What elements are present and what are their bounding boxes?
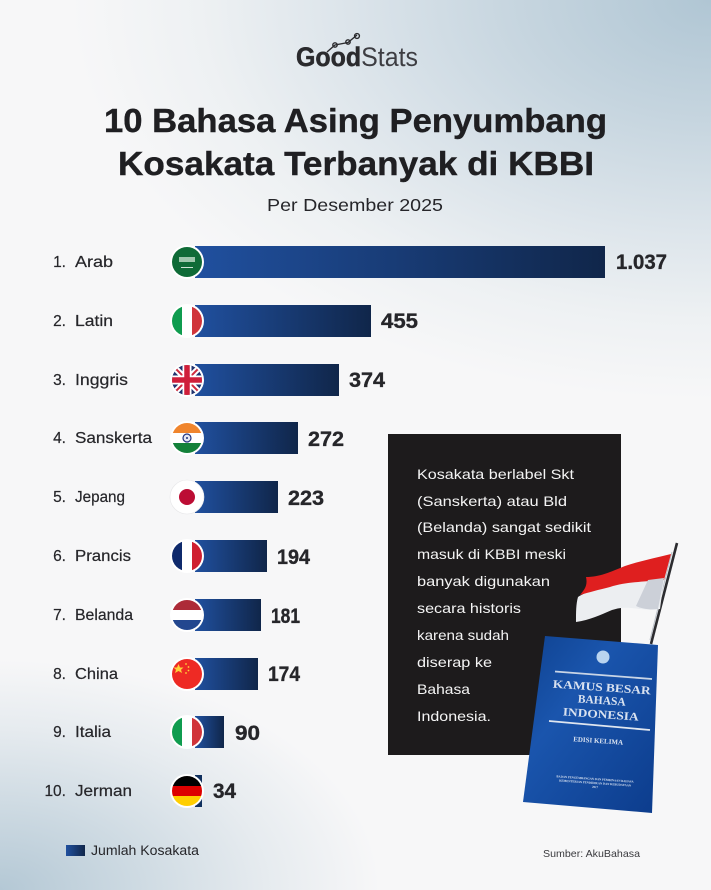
row: Inggris: Inggris [75, 372, 128, 389]
row: Jerman [44, 774, 236, 808]
row: Latin: 2. [53, 313, 66, 330]
row: Prancis: 194 [277, 546, 310, 569]
row: China: 8. [53, 666, 66, 683]
callout: black text panel: masuk di KBBI meski [417, 546, 566, 562]
row: Belanda: 181 [271, 605, 300, 628]
logo wordmark: GoodStats [296, 42, 418, 72]
row: Jepang: 5. [53, 489, 66, 506]
row: Latin: Latin [75, 313, 113, 330]
row: Latin [53, 304, 418, 338]
logo: GoodStats [296, 34, 418, 72]
row: Jepang: 223 [288, 487, 324, 510]
row: Arab [53, 245, 667, 279]
row: Arab: 1. [53, 254, 66, 271]
callout: black text panel: Kosakata berlabel Skt [417, 466, 574, 482]
row: Italia [53, 715, 260, 749]
callout: black text panel: (Belanda) sangat sedikit [417, 519, 591, 535]
row: Sanskerta [53, 421, 344, 455]
row: China: China [75, 666, 118, 683]
callout: black text panel: karena sudah [417, 627, 509, 643]
row: Inggris [53, 363, 385, 397]
callout: black text panel: banyak digunakan [417, 573, 550, 589]
legend: Jumlah Kosakata [91, 843, 200, 858]
title [104, 102, 607, 182]
icon: KBBI book: BADAN PENGEMBANGAN DAN PEMBINAAN BAHASA [556, 774, 635, 784]
row: Jepang [53, 480, 324, 514]
icon: KBBI book [523, 636, 658, 813]
row: Italia: 90 [235, 722, 260, 745]
row: Prancis: Prancis [75, 548, 131, 565]
callout: black text panel: secara historis [417, 600, 521, 616]
icon: KBBI book: KAMUS BESAR [552, 679, 652, 697]
row: Inggris: 374 [349, 369, 385, 392]
row: Italia: 9. [53, 724, 66, 741]
icon: KBBI book: BAHASA [577, 693, 627, 709]
row: Sanskerta: 4. [53, 430, 66, 447]
callout: black text panel [388, 434, 621, 755]
row: Sanskerta: Sanskerta [75, 430, 152, 447]
icon: KBBI book: 2017 [592, 785, 599, 789]
row: Sanskerta: 272 [308, 428, 344, 451]
row: Jerman: 10. [44, 783, 66, 800]
row: China: 174 [268, 663, 300, 686]
logo trend line icon [327, 34, 359, 52]
row: Latin: 455 [381, 310, 418, 333]
bar chart [44, 245, 667, 808]
source: Sumber: AkuBahasa [543, 848, 640, 860]
title: Kosakata Terbanyak di KBBI [118, 145, 594, 182]
row: Italia: Italia [75, 724, 111, 741]
row: Inggris: 3. [53, 372, 66, 389]
row: Prancis: 6. [53, 548, 66, 565]
icon: KBBI book: EDISI KELIMA [573, 735, 623, 747]
row: Jerman: 34 [213, 780, 236, 803]
subtitle: Per Desember 2025 [267, 195, 443, 215]
callout: black text panel: (Sanskerta) atau Bld [417, 493, 567, 509]
title: 10 Bahasa Asing Penyumbang [104, 102, 607, 139]
row: Jerman: Jerman [75, 783, 132, 800]
callout: black text panel: Indonesia. [417, 708, 491, 724]
row: Belanda: Belanda [75, 607, 133, 624]
row: Belanda: 7. [53, 607, 66, 624]
icon: KBBI book: KEMENTERIAN PENDIDIKAN DAN KEBUDAYAAN [559, 778, 632, 788]
callout: black text panel: Bahasa [417, 681, 470, 697]
callout: black text panel: diserap ke [417, 654, 492, 670]
row: Prancis [53, 539, 310, 573]
row: Arab: 1.037 [616, 251, 667, 274]
row: Jepang: Jepang [75, 489, 125, 506]
icon: Indonesian flag [576, 543, 677, 644]
row: Arab: Arab [75, 254, 113, 271]
icon: KBBI book: INDONESIA [562, 706, 640, 724]
row: China [53, 657, 300, 691]
row: Belanda [53, 598, 300, 632]
